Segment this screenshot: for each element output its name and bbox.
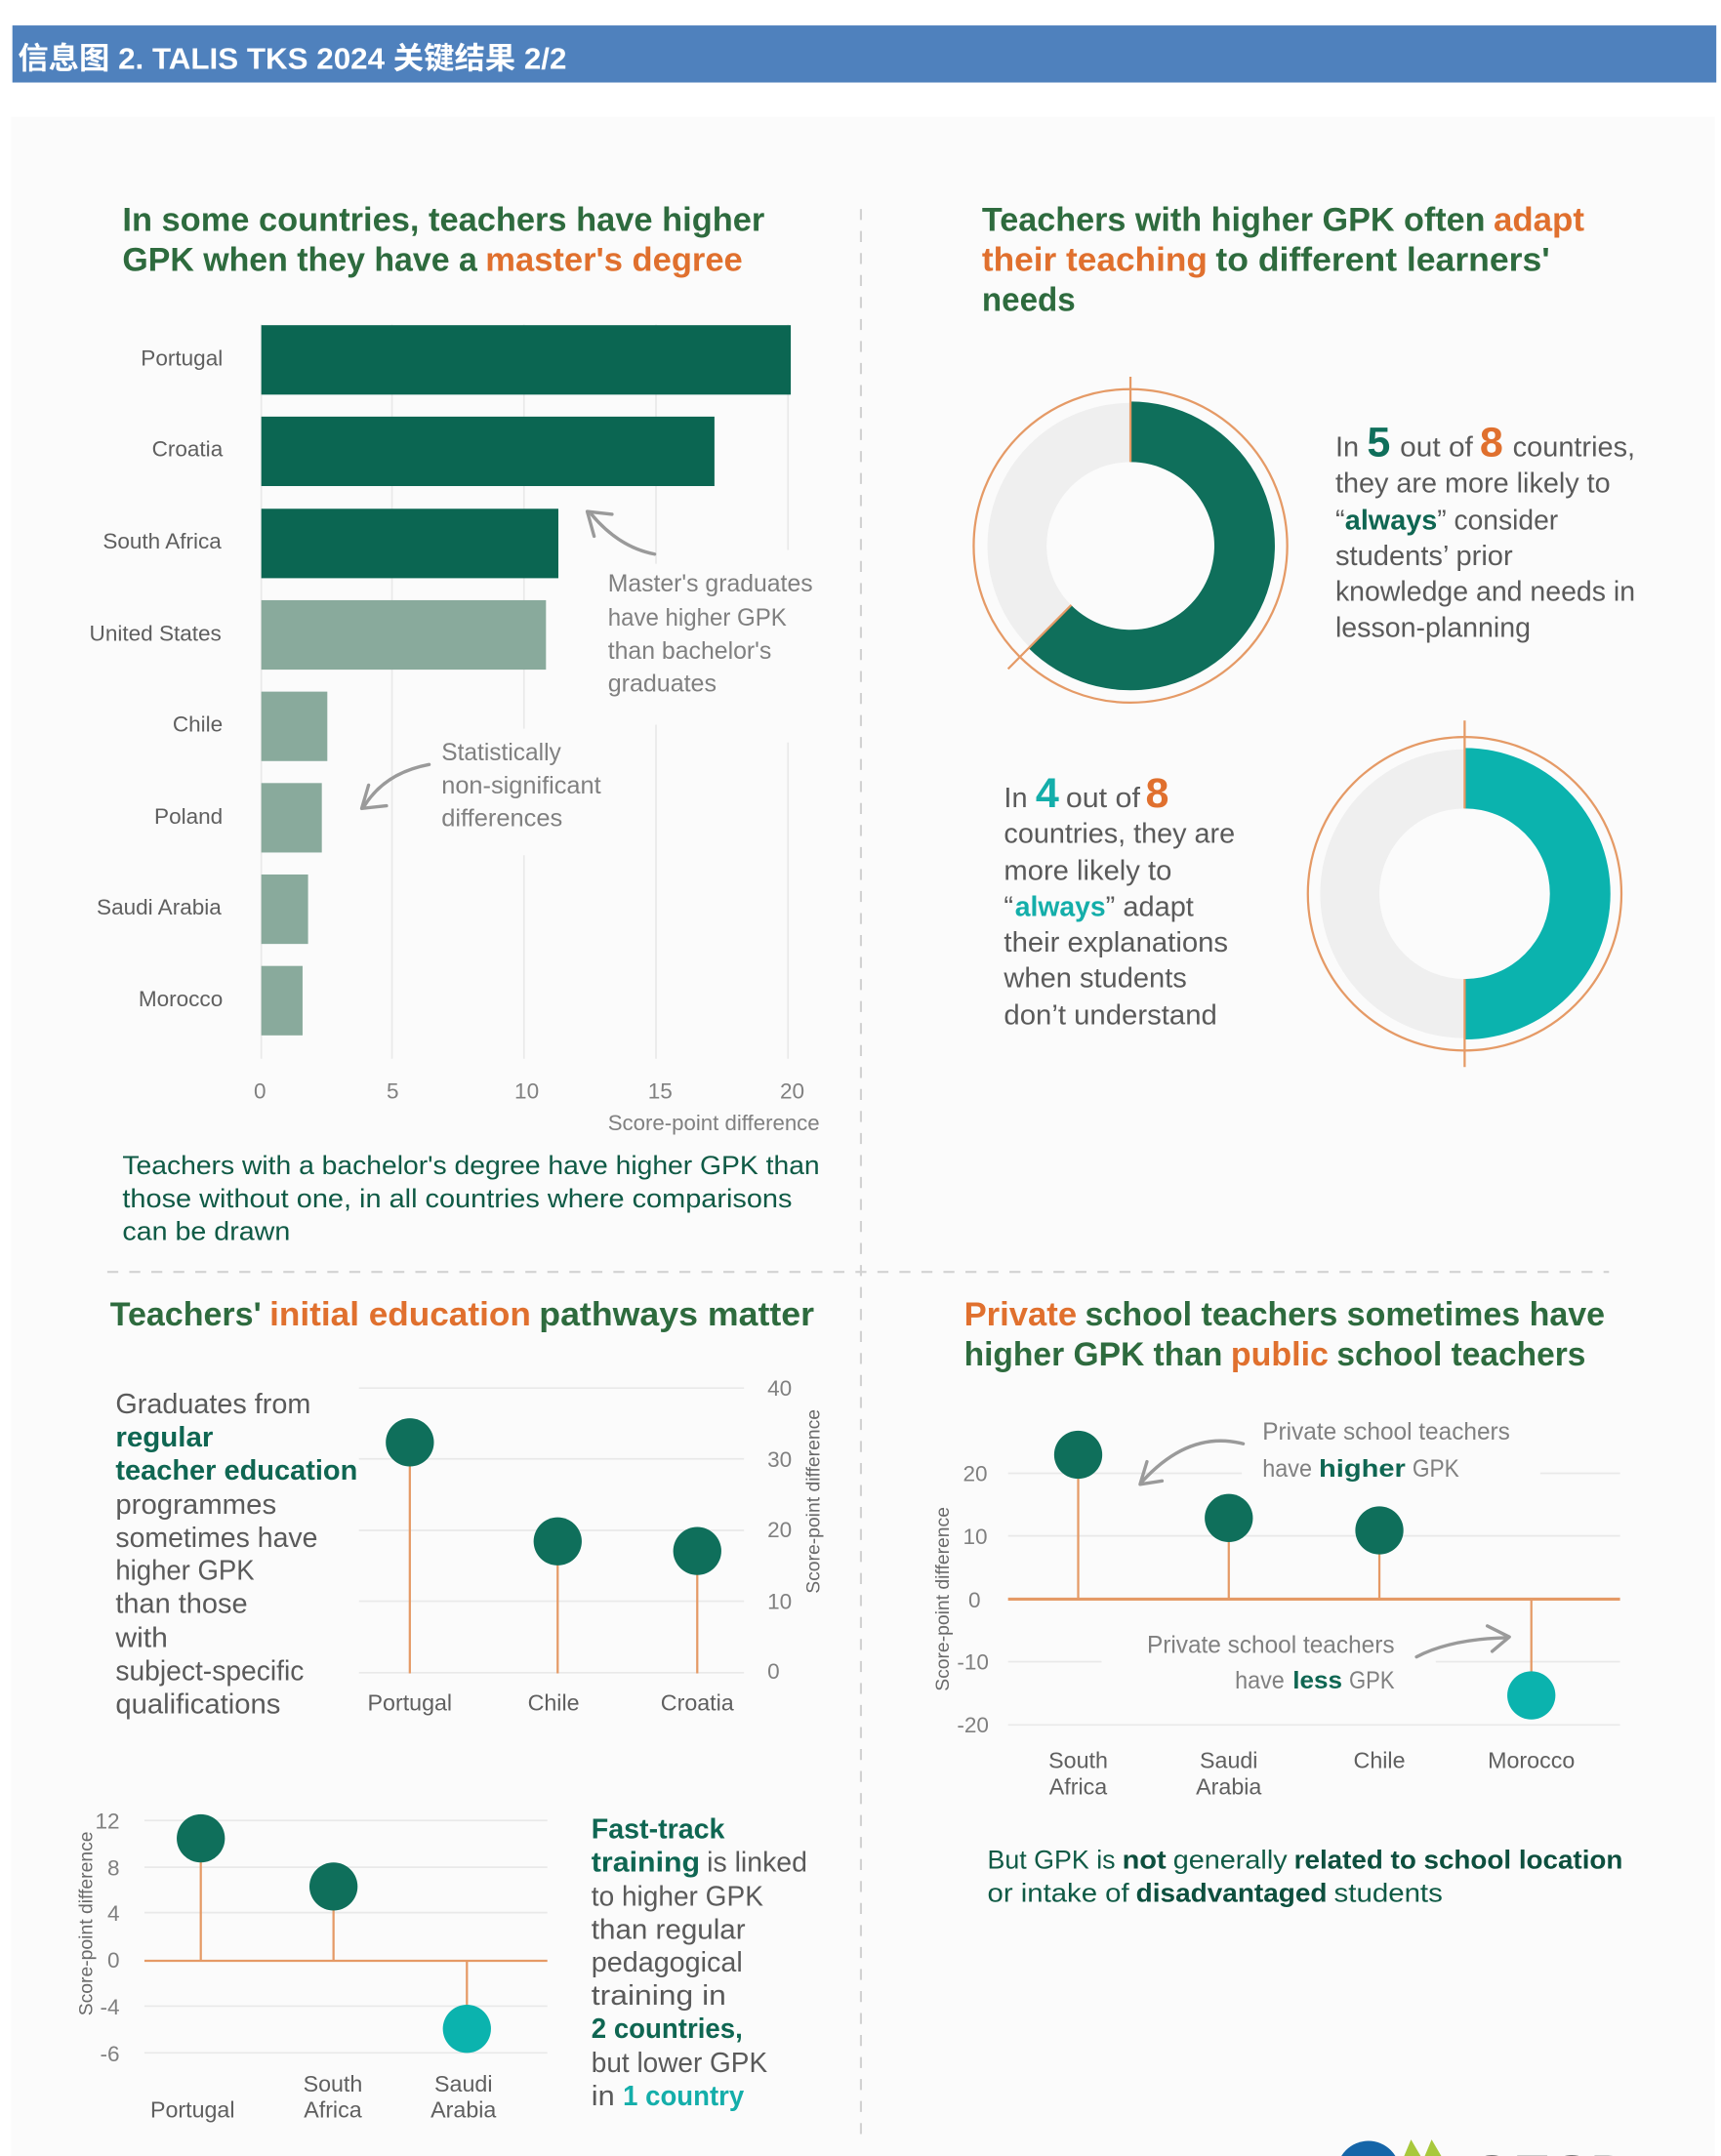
lollipop chart: fast-track training: Portugal [150,2097,235,2123]
heading: master's degree: In some countries, teachers have higher [122,202,764,239]
callout: higher GPK: Private school teachers [1262,1418,1510,1445]
lollipop chart: private school teachers: Chile [1354,1748,1406,1773]
heading: private vs public [964,1296,1605,1373]
text: 5 of 8 countries: In [1335,432,1359,464]
text: 4 of 8 countries: out of [1066,783,1141,814]
lollipop chart: private school teachers: Saudi [1200,1748,1257,1773]
bar chart: score-point difference by country: Portugal [141,346,223,371]
text: regular teacher education: subject-specific [115,1656,304,1688]
text: 4 of 8 countries: 8 [1146,770,1168,816]
text: fast-track training: in [592,2081,615,2112]
bar chart: score-point difference by country: 20 [780,1079,804,1104]
lollipop chart: private school teachers: Morocco [1488,1748,1575,1773]
text: fast-track training: training [592,1847,700,1878]
text: fast-track training [592,1814,807,2112]
text: fast-track training: 2 countries, [592,2014,743,2045]
callout: higher GPK: GPK [1413,1455,1459,1483]
text: bachelor's degree note: those without one, in all countries where comparisons [122,1184,792,1213]
text: school location note: generally [1173,1846,1288,1875]
heading: private vs public: school teachers [1336,1336,1585,1373]
callout: non-significant differences [362,739,601,833]
text: 4 of 8 countries: ” adapt [1106,891,1194,922]
donut chart: 4 of 8 countries [1308,720,1621,1067]
panel: master's degree [90,202,820,1246]
text: 5 of 8 countries: always [1345,505,1437,536]
bar chart: score-point difference by country: 15 [648,1079,673,1104]
lollipop chart: regular teacher education: 10 [767,1589,792,1613]
lollipop chart: fast-track training: 12 [96,1810,120,1834]
text: regular teacher education: programmes [115,1489,276,1521]
lollipop chart: fast-track training: 0 [107,1948,120,1973]
heading: private vs public: higher GPK than [964,1336,1222,1373]
bar chart: score-point difference by country: Poland [154,804,223,829]
bar chart: score-point difference by country: Score-point difference [608,1111,820,1135]
text: 4 of 8 countries: their explanations [1004,927,1228,958]
text: school location note: or intake of [988,1878,1129,1907]
text: 5 of 8 countries: “ [1335,505,1345,536]
text: regular teacher education: Graduates from [115,1389,310,1420]
heading: adapt teaching: Teachers with higher GPK often [982,202,1486,239]
text: 5 of 8 countries: students’ prior [1335,541,1513,572]
logo: OECD [1336,2139,1631,2156]
text: 5 of 8 countries [1335,420,1635,643]
heading: adapt teaching [982,202,1584,318]
text: regular teacher education: teacher education [115,1455,357,1486]
text: 4 of 8 countries: In [1004,783,1028,814]
lollipop chart: fast-track training: -4 [101,1995,120,2019]
text: bachelor's degree note: can be drawn [122,1217,290,1246]
bar chart: score-point difference by country: Morocco [139,987,223,1011]
heading: private vs public: school teachers sometimes have [1086,1296,1605,1333]
callout: master's graduates [588,511,813,698]
bar chart: score-point difference by country: Croatia [152,437,224,462]
lollipop chart: private school teachers: Score-point difference [932,1507,954,1691]
text: fast-track training: 1 country [623,2081,744,2112]
lollipop chart: regular teacher education: Croatia [661,1690,734,1716]
callout: less GPK: less [1292,1667,1342,1694]
callout: less GPK [1147,1626,1509,1694]
text: 4 of 8 countries: countries, they are [1004,819,1235,850]
callout: higher GPK: have [1262,1455,1312,1483]
text: 5 of 8 countries: knowledge and needs in [1335,577,1635,608]
bar chart: score-point difference by country: South Africa [102,529,222,553]
bar chart: score-point difference by country: 10 [514,1079,539,1104]
lollipop chart: private school teachers: 10 [963,1525,988,1549]
text: fast-track training: to higher GPK [592,1882,763,1913]
bar chart: score-point difference by country: Chile [173,712,223,736]
text: regular teacher education: sometimes have [115,1523,317,1554]
text: school location note: related to school location [1294,1846,1622,1875]
lollipop chart: fast-track training: -6 [101,2042,120,2066]
lollipop chart: regular teacher education: Portugal [368,1690,452,1716]
lollipop chart: regular teacher education: 20 [767,1518,792,1542]
heading: adapt teaching: needs [982,281,1076,318]
text: school location note: disadvantaged [1136,1878,1328,1907]
text: 4 of 8 countries: “ [1004,891,1013,922]
text: 4 of 8 countries: more likely to [1004,856,1171,887]
title banner [13,25,1716,83]
callout: non-significant differences: differences [441,805,562,833]
text: 5 of 8 countries: countries, [1513,432,1635,464]
heading: initial education: Teachers' [110,1296,262,1333]
lollipop chart: fast-track training: Arabia [430,2097,496,2123]
text: 5 of 8 countries: they are more likely to [1335,468,1611,499]
bar chart: score-point difference by country: United States [90,622,222,646]
bar chart: score-point difference by country [90,324,820,1135]
panel: private vs public [932,1296,1622,1907]
callout: master's graduates: have higher GPK [608,604,787,631]
lollipop chart: fast-track training: 8 [107,1856,120,1881]
heading: master's degree [122,202,764,279]
bar chart: score-point difference by country: Saudi Arabia [97,895,222,919]
lollipop chart: regular teacher education [359,1376,825,1716]
text: fast-track training: than regular [592,1914,746,1945]
lollipop chart: fast-track training: South [304,2071,362,2096]
text: 4 of 8 countries: always [1015,891,1106,922]
text: 5 of 8 countries: 8 [1480,420,1503,466]
lollipop chart: regular teacher education: Chile [528,1690,580,1716]
heading: master's degree: GPK when they have a [122,242,478,279]
heading: adapt teaching: adapt [1494,202,1584,239]
lollipop chart: private school teachers: -10 [957,1649,989,1674]
text: 5 of 8 countries: 5 [1367,420,1390,466]
title banner: 信息图 2. TALIS TKS 2024 关键结果 2/2 [18,41,566,75]
callout: master's graduates: Master's graduates [608,570,813,597]
text: 5 of 8 countries: lesson-planning [1335,612,1531,643]
lollipop chart: private school teachers: 20 [963,1461,988,1485]
callout: master's graduates: graduates [608,671,717,698]
text: school location note [988,1846,1622,1907]
heading: initial education: initial education [269,1296,531,1333]
text: fast-track training: Fast-track [592,1814,725,1846]
text: fast-track training: training in [592,1980,726,2012]
lollipop chart: fast-track training: Saudi [434,2071,492,2096]
lollipop chart: private school teachers: Arabia [1196,1773,1261,1799]
donut chart: 5 of 8 countries [973,377,1288,703]
panel: initial education pathways [75,1296,825,2123]
text: 4 of 8 countries: don’t understand [1004,1000,1217,1032]
bar chart: score-point difference by country: 5 [387,1079,398,1104]
lollipop chart: fast-track training: Score-point difference [75,1831,97,2015]
text: bachelor's degree note: Teachers with a bachelor's degree have higher GPK than [122,1151,820,1180]
text: regular teacher education [114,1389,357,1720]
heading: initial education [110,1296,814,1333]
callout: master's graduates: than bachelor's [608,637,771,665]
text: fast-track training: pedagogical [592,1947,743,1978]
callout: higher GPK [1140,1418,1510,1485]
lollipop chart: private school teachers: 0 [968,1588,980,1612]
lollipop chart: regular teacher education: 30 [767,1447,792,1472]
heading: initial education: pathways matter [539,1296,814,1333]
text: school location note: But GPK is [988,1846,1116,1875]
lollipop chart: fast-track training: 4 [107,1901,120,1926]
lollipop chart: fast-track training [75,1810,548,2123]
lollipop chart: fast-track training: Africa [304,2097,362,2123]
callout: less GPK: Private school teachers [1147,1631,1395,1658]
text: school location note: not [1123,1846,1167,1875]
heading: private vs public: public [1231,1336,1329,1373]
lollipop chart: private school teachers: Africa [1049,1773,1107,1799]
panel: adapt teaching [973,202,1635,1067]
heading: master's degree: master's degree [485,242,743,279]
callout: less GPK: GPK [1349,1667,1395,1694]
heading: adapt teaching: to different learners' [1215,242,1550,279]
lollipop chart: private school teachers: South [1048,1748,1108,1773]
lollipop chart: regular teacher education: 40 [767,1376,792,1401]
text: fast-track training: is linked [707,1847,807,1878]
text: regular teacher education: regular [115,1422,213,1453]
text: fast-track training: but lower GPK [592,2048,767,2079]
heading: private vs public: Private [964,1296,1077,1333]
text: 4 of 8 countries: when students [1003,963,1187,995]
lollipop chart: private school teachers [932,1431,1620,1799]
lollipop chart: private school teachers: -20 [957,1713,989,1737]
text: 4 of 8 countries: 4 [1036,770,1059,816]
lollipop chart: regular teacher education: Score-point difference [803,1409,825,1594]
text: regular teacher education: with [114,1623,168,1654]
callout: non-significant differences: non-significant [441,772,601,799]
text: regular teacher education: higher GPK [115,1556,255,1587]
text: bachelor's degree note [122,1151,820,1246]
text: school location note: students [1334,1878,1443,1907]
callout: higher GPK: higher [1319,1455,1406,1483]
heading: adapt teaching: their teaching [982,242,1208,279]
bar chart: score-point difference by country: 0 [254,1079,266,1104]
callout: less GPK: have [1235,1667,1285,1694]
text: 4 of 8 countries [1003,770,1235,1032]
text: regular teacher education: than those [115,1589,248,1620]
text: 5 of 8 countries: out of [1400,432,1474,464]
lollipop chart: regular teacher education: 0 [767,1659,780,1684]
callout: non-significant differences: Statistically [441,739,561,766]
text: regular teacher education: qualifications [115,1688,280,1720]
text: 5 of 8 countries: ” consider [1437,505,1559,536]
